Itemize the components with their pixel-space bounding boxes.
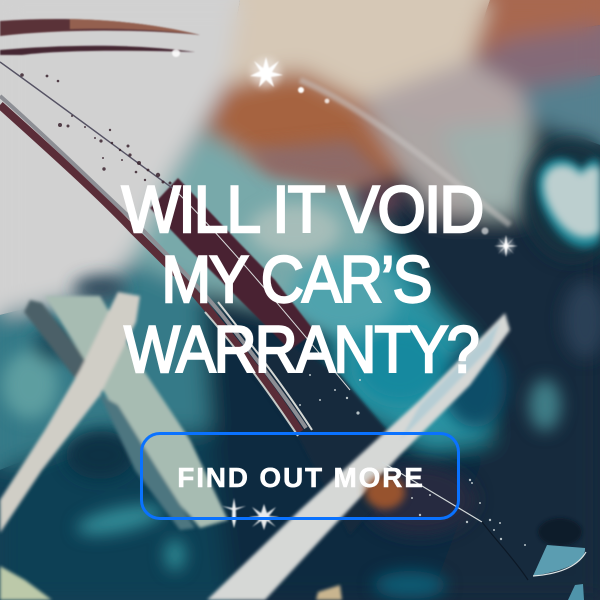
bright diagonal bar: [207, 313, 510, 600]
sparkles: [172, 49, 518, 530]
water droplets, dark: [20, 73, 172, 184]
button: find out more: [140, 432, 460, 520]
blurred reflections: [2, 140, 600, 599]
headline line 3: WARRANTY?: [124, 312, 478, 386]
glass edge highlight: [300, 80, 510, 225]
headline: [120, 172, 482, 386]
headline line 1: WILL IT VOID: [122, 172, 482, 246]
maroon window pillar: [150, 178, 315, 350]
dark lower pillar: [250, 345, 400, 535]
orange lens reflection: [365, 475, 405, 509]
side mirror glass fragment: [533, 518, 586, 600]
curved roof trim: [0, 19, 200, 55]
button label: FIND OUT MORE: [177, 462, 425, 493]
thin bright wire: [382, 462, 482, 522]
headline line 2: MY CAR’S: [162, 242, 430, 316]
left reflection strips: [0, 292, 228, 600]
wing mirror reflection: [524, 140, 600, 260]
chrome window trim lines: [0, 62, 350, 436]
water droplets, light: [299, 374, 526, 546]
